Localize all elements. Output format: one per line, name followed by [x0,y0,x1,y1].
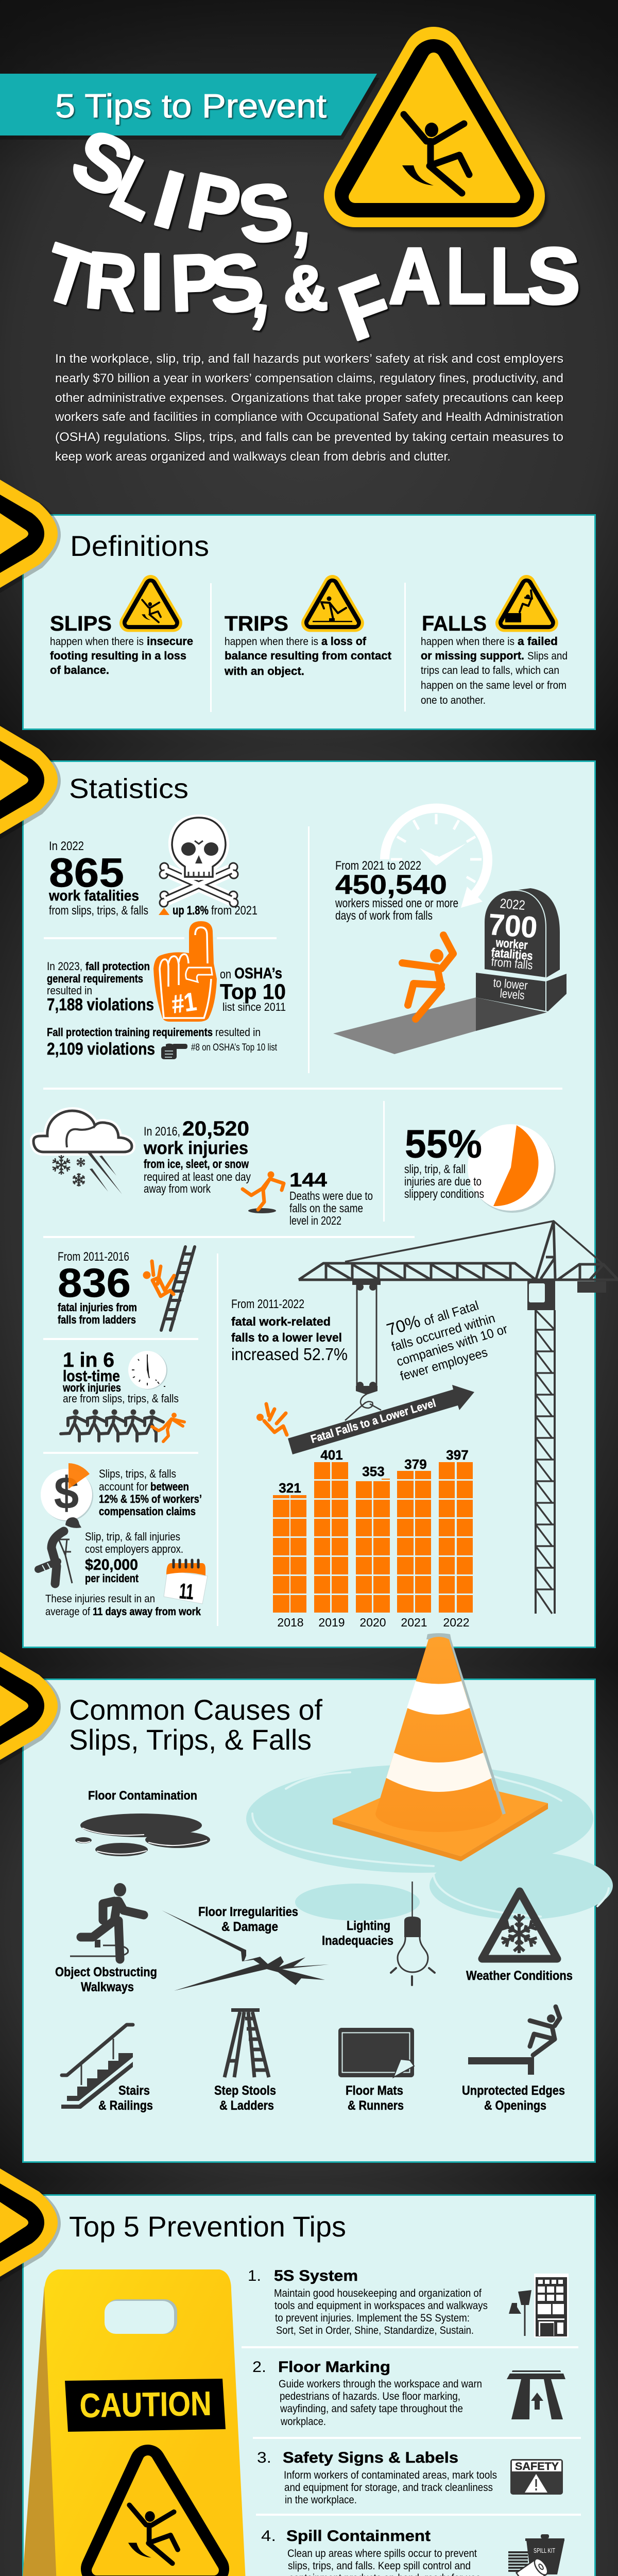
section marker: top 5 tips [0,2168,61,2282]
tip 2: floor marking [252,2359,482,2428]
stat: number one violations: general requirements [47,972,143,985]
bar years: 2018 [277,1616,304,1629]
caution label: CAUTION [79,2384,212,2425]
cause: lighting inadequacies: Inadequacies [322,1934,393,1948]
stat: number one violations: 2,109 violations [47,1039,155,1058]
tip 3: safety signs and labels: in the workplace. [285,2494,357,2506]
heading: common causes: Common Causes of [69,1693,322,1726]
icon: building and broom [509,2274,569,2337]
stat: 865 work fatalities: from 2021 [211,904,258,918]
cause: stairs and railings [61,2025,153,2113]
definition: slips: footing resulting in a loss [50,649,186,662]
stat: cost per incident: cost employers approx. [85,1543,183,1555]
gravestone text: worker [495,936,528,953]
stat: 836 ladder falls [58,1250,137,1326]
stat: number one violations: resulted in [215,1026,261,1039]
stat: 144 deaths: falls on the same [289,1201,363,1215]
icon: wall clock [128,1351,167,1389]
icon: orange foam finger: #1 [170,987,198,1019]
bar values: 321 [279,1480,301,1496]
title: slips, trips, and falls: F [329,258,403,358]
stat: 144 deaths: 144 [289,1170,327,1191]
stat: workers compensation: account for [99,1480,148,1493]
banner text: 5 Tips to Prevent [55,87,327,125]
callout: 70 percent of fatal falls: companies with 10 or [395,1321,509,1369]
pie chart: 55 percent: injuries are due to [404,1175,482,1188]
sign warning triangle [97,2461,214,2570]
tip 2: floor marking: workplace. [280,2416,326,2428]
stat: 20,520 work injuries: required at least one day [144,1170,251,1183]
header banner [0,74,380,140]
title: slips, trips, and falls: S [527,231,580,320]
icon: clock arrow [385,808,488,908]
title: slips, trips, and falls: , [249,244,279,335]
tip 3: safety signs and labels: Safety Signs & Labels [283,2449,458,2466]
stat: number one violations: Fall protection training requirements [47,1026,213,1039]
tip 1: 5S system: 1. [248,2267,261,2284]
stat: 144 deaths: Deaths were due to [289,1189,373,1202]
title: slips, trips, and falls [32,111,580,358]
title: slips, trips, and falls: I [145,154,193,246]
section marker: common causes [0,1652,61,1765]
panel: common causes [23,1633,613,2162]
title: slips, trips, and falls: T [32,227,105,326]
stat: 865 work fatalities: 865 [49,850,124,895]
definition: trips [224,584,392,677]
pie chart: 55 percent: slippery conditions [404,1187,484,1200]
stat: cost per incident: per incident [85,1572,139,1585]
tip 1: 5S system: Sort, Set in Order, Shine, Standardize, Sustain. [276,2325,474,2336]
cause: object obstructing walkways: Object Obstructing [55,1965,157,1979]
panel: statistics [23,761,618,1648]
cause: unprotected edges and openings [462,2007,565,2113]
icon: dollar pie: $ [54,1467,79,1518]
stat: number one violations: list since 2011 [222,1001,286,1013]
intro paragraph: (OSHA) regulations. Slips, trips, and falls can be prevented by taking certain measures to [55,430,563,444]
stat: 865 work fatalities: work fatalities [48,888,139,904]
icon: dollar pie [41,1463,93,1521]
pie chart: 55 percent: 55% [405,1122,482,1166]
icon: traffic cone [333,1633,548,1861]
icon: spill kit: SPILL KIT [534,2547,555,2554]
tip 1: 5S system: tools and equipment in workspaces and walkways [274,2300,488,2312]
stat: number one violations: on [220,968,231,981]
stat: cost per incident [45,1530,201,1618]
stat: fatal falls increased: falls to a lower level [231,1331,342,1344]
stat: 865 work fatalities: In 2022 [49,839,84,853]
tip 1: 5S system: Maintain good housekeeping and organization of [274,2287,482,2299]
tip 2: floor marking: Floor Marking [278,2359,390,2376]
stat: cost per incident: 11 days away from work [93,1606,201,1618]
title: slips, trips, and falls: P [169,237,221,328]
cause: floor contamination: Floor Contamination [88,1789,197,1803]
gravestone text: 700 [487,908,539,944]
definition: slips: of balance. [50,664,109,676]
stat: fatal falls increased: increased 52.7% [231,1345,348,1364]
callout: 70 percent of fatal falls [384,1298,509,1384]
stat: 450,540 workers missed work: workers missed one or more [335,896,458,910]
panel: top 5 prevention tips [23,2195,595,2576]
stat: cost per incident: average of [45,1606,90,1618]
tip 3: safety signs and labels [257,2449,497,2506]
heading: common causes: Slips, Trips, & Falls [69,1723,312,1756]
definition: falls: one to another. [421,694,486,706]
stat: 865 work fatalities: from slips, trips, & falls [49,904,148,918]
stat: 1 in 6 lost-time: work injuries [62,1381,121,1394]
bar values [279,1447,469,1496]
stat: 1 in 6 lost-time: 1 in 6 [63,1349,114,1371]
cause: floor irregularities and damage: & Damage [221,1920,278,1934]
stat: workers compensation: compensation claims [99,1505,196,1518]
definition: falls: Slips and [527,650,568,662]
bar years: 2022 [443,1616,470,1629]
definition: falls [421,584,568,706]
tip 4: spill containment: Spill Containment [286,2528,431,2545]
title: slips, trips, and falls: , [290,172,317,263]
stat: 20,520 work injuries [143,1117,251,1195]
water puddles [246,1765,613,1921]
stat: number one violations: resulted in [47,984,92,997]
intro paragraph: other administrative expenses. Organizations that take proper safety precautions can keep [55,391,563,405]
icon: skull and crossbones [160,815,238,907]
stat: workers compensation: between [150,1480,189,1493]
tip 2: floor marking: pedestrians of hazards. Use floor marking, [280,2391,460,2402]
definition: slips [50,584,193,676]
bar years: 2020 [359,1616,386,1629]
cause: lighting inadequacies [322,1882,435,1985]
stat: cost per incident: Slip, trip, & fall injuries [85,1530,180,1543]
tip 3: safety signs and labels: 3. [257,2449,271,2466]
heading: common causes [69,1693,322,1756]
gravestone text: to lower [493,976,528,993]
title: slips, trips, and falls: L [99,140,174,238]
section marker: definitions [0,480,61,593]
bar values: 397 [446,1447,469,1463]
intro paragraph: nearly $70 billion a year in workers’ compensation claims, regulatory fines, productivity, and [55,371,563,385]
cause: floor mats and runners: & Runners [348,2098,404,2113]
stat: number one violations: In 2023, [47,960,82,973]
stat: workers compensation [99,1467,202,1518]
cause: stairs and railings: & Railings [98,2098,153,2113]
tip 2: floor marking: wayfinding, and safety tape throughout the [280,2403,463,2415]
definition: falls: a failed [518,635,558,648]
cause: step stools and ladders [214,2008,276,2113]
stat: 450,540 workers missed work [335,859,458,923]
title: slips, trips, and falls: & [284,253,328,323]
callout: 70 percent of fatal falls: of all Fatal [422,1298,480,1329]
icon: ladder with falling worker [143,1247,195,1330]
cause: floor mats and runners: Floor Mats [346,2083,403,2098]
stat: 20,520 work injuries: away from work [144,1182,211,1195]
cause: object obstructing walkways: Walkways [81,1980,134,1994]
definition: trips: a loss of [321,635,367,648]
stat: fatal falls increased [231,1297,348,1364]
stat: 1 in 6 lost-time: are from slips, trips, & falls [63,1392,179,1405]
title: slips, trips, and falls: P [181,155,248,253]
stat: 1 in 6 lost-time: lost-time [63,1367,120,1385]
panel: definitions [23,515,595,730]
definition: slips: insecure [147,635,193,648]
icon: gravestone [476,888,566,1011]
cause: stairs and railings: Stairs [118,2083,150,2098]
intro paragraph: keep work areas organized and walkways clean from debris and clutter. [55,450,451,464]
gravestone text: from falls [491,955,534,973]
stat: 450,540 workers missed work: 450,540 [335,870,447,900]
definition: trips: TRIPS [225,612,288,635]
tip 1: 5S system: to prevent injuries. Implement the 5S System: [275,2312,470,2324]
stat: number one violations: 7,188 violations [47,995,154,1014]
stat: 450,540 workers missed work: days of work from falls [335,909,433,923]
definition: falls: happen on the same level or from [421,680,566,691]
cause: unprotected edges and openings: Unprotected Edges [462,2083,565,2098]
icon: calendar: 11 [178,1579,195,1604]
stat: 836 ladder falls: fatal injuries from [58,1301,137,1314]
stat: 865 work fatalities: up 1.8% [173,904,209,918]
icon: safety sign: SAFETY [515,2461,559,2472]
stat: number one violations [47,960,286,1058]
stat: workers compensation: 12% & 15% of workers’ [99,1493,202,1505]
cause: unprotected edges and openings: & Openings [484,2098,546,2113]
pie chart: 55 percent [404,1122,556,1213]
definition: falls: happen when there is [421,636,514,648]
stat: 20,520 work injuries: 20,520 [182,1117,249,1140]
title: slips, trips, and falls: A [389,232,440,321]
cause: lighting inadequacies: Lighting [347,1919,390,1933]
stat: fatal falls increased: fatal work-related [231,1315,331,1328]
bar years [277,1616,470,1629]
stat: fatal falls increased: From 2011-2022 [231,1297,304,1311]
bar values: 379 [404,1456,427,1472]
shadow on floor [333,997,547,1054]
gravestone text: 2022 [500,895,526,913]
definition: falls: FALLS [422,612,487,635]
bar values: 401 [320,1447,343,1463]
stat: number one violations: Top 10 [220,979,286,1004]
cause: step stools and ladders: Step Stools [214,2083,276,2098]
callout: 70 percent of fatal falls: falls occurred within [390,1311,497,1354]
tip 4: spill containment [261,2528,484,2576]
stat: number one violations: #8 on OSHA’s Top 10 list [191,1042,278,1053]
cause: weather conditions [466,1891,573,1983]
definition: trips: balance resulting from contact [225,649,392,662]
gravestone text: levels [500,987,525,1003]
stat: cost per incident: These injuries result in an [45,1593,155,1605]
stat: 20,520 work injuries: work injuries [143,1138,248,1158]
stat: workers compensation: Slips, trips, & falls [99,1467,176,1480]
tip 1: 5S system: 5S System [274,2267,358,2284]
stat: 1 in 6 lost-time [62,1349,179,1405]
stat: 144 deaths: level in 2022 [289,1214,341,1227]
section marker: statistics [0,726,61,839]
icon: pointing hand [161,1044,187,1059]
bar chart: fatal falls to a lower level [273,1447,473,1629]
icon: line of walking workers [61,1410,184,1442]
intro paragraph: In the workplace, slip, trip, and fall hazards put workers’ safety at risk and cost employers [55,352,563,366]
icon: safety sign [510,2459,563,2495]
stat: cost per incident: $20,000 [85,1556,138,1573]
gravestone text: fatalities [491,946,534,963]
tip 4: spill containment: slips, trips, and falls. Keep spill control and [288,2560,471,2572]
cause: weather conditions: Weather Conditions [466,1969,573,1983]
callout: 70 percent of fatal falls: 70% [384,1311,422,1340]
tip 3: safety signs and labels: Inform workers of contaminated areas, mark tools [284,2469,497,2481]
title: slips, trips, and falls: R [82,235,140,328]
title: slips, trips, and falls: I [140,237,164,326]
cause: floor irregularities and damage [162,1905,329,1991]
stat: 144 deaths [243,1170,373,1227]
stat: 836 ladder falls: 836 [58,1260,131,1306]
stat: 20,520 work injuries: In 2016, [144,1125,180,1139]
definition: falls: or missing support. [421,649,524,662]
bar years: 2021 [401,1616,427,1629]
definition: slips: SLIPS [50,612,112,635]
pie chart: 55 percent: slip, trip, & fall [404,1162,466,1176]
tip 4: spill containment: 4. [261,2528,276,2545]
gravestone text [487,895,539,1003]
title: slips, trips, and falls: L [446,232,486,321]
icon: falling orange worker [402,935,453,1019]
definition: trips: happen when there is [225,636,318,648]
icon: floor marking road [507,2370,565,2419]
stat: 450,540 workers missed work: From 2021 to 2022 [335,859,421,873]
tip 2: floor marking: Guide workers through the workspace and warn [279,2378,482,2390]
heading: top 5 prevention tips: Top 5 Prevention Tips [69,2210,346,2243]
tip 2: floor marking: 2. [252,2359,266,2376]
heading: statistics: Statistics [69,773,188,804]
definition: slips: happen when there is [50,636,144,648]
tip 1: 5S system [248,2267,488,2336]
stat: number one violations: OSHA’s [234,965,282,982]
tip 4: spill containment: Clean up areas where spills occur to prevent [287,2548,477,2560]
caution label [65,2379,226,2432]
callout: 70 percent of fatal falls: fewer employees [399,1345,489,1384]
icon: large slip warning sign [355,58,514,197]
icon: falling worker at arrow [256,1404,287,1435]
intro paragraph: workers safe and facilities in compliance with Occupational Safety and Health Administration [55,410,563,424]
intro paragraph [55,352,563,464]
icon: injured worker on crutch [38,1517,81,1584]
cause: floor mats and runners [338,2028,414,2113]
definition: falls: trips can lead to falls, which can [421,665,559,676]
heading: definitions: Definitions [70,530,209,562]
arrow: fatal falls to a lower level [288,1385,474,1454]
cause: floor contamination [75,1789,210,1856]
definition: trips: with an object. [224,665,304,677]
bar values: 353 [362,1464,385,1479]
illustration: caution floor sign in puddle [0,2269,325,2576]
icon: spill kit [508,2534,564,2576]
cause: floor irregularities and damage: Floor Irregularities [198,1905,298,1919]
stat: 836 ladder falls: From 2011-2016 [58,1250,129,1264]
cause: object obstructing walkways [55,1883,157,1994]
stat: 865 work fatalities [48,839,258,918]
arrow: fatal falls to a lower level: Fatal Falls to a Lower Level [309,1396,437,1446]
icon: storm cloud [33,1111,132,1194]
title: slips, trips, and falls: L [490,232,530,321]
title: slips, trips, and falls: S [202,234,269,332]
stat: number one violations: fall protection [85,960,150,973]
icon: calendar [164,1560,208,1604]
tip 3: safety signs and labels: and equipment for storage, and track cleanliness [284,2482,493,2494]
title: slips, trips, and falls: S [234,166,297,260]
title: slips, trips, and falls: S [60,111,145,214]
stat: 836 ladder falls: falls from ladders [58,1313,136,1326]
icon: tower crane [299,1221,618,1614]
cause: step stools and ladders: & Ladders [219,2098,274,2113]
bar years: 2019 [318,1616,345,1629]
icon: orange foam finger [153,921,217,1022]
stat: 20,520 work injuries: from ice, sleet, or snow [144,1157,249,1171]
